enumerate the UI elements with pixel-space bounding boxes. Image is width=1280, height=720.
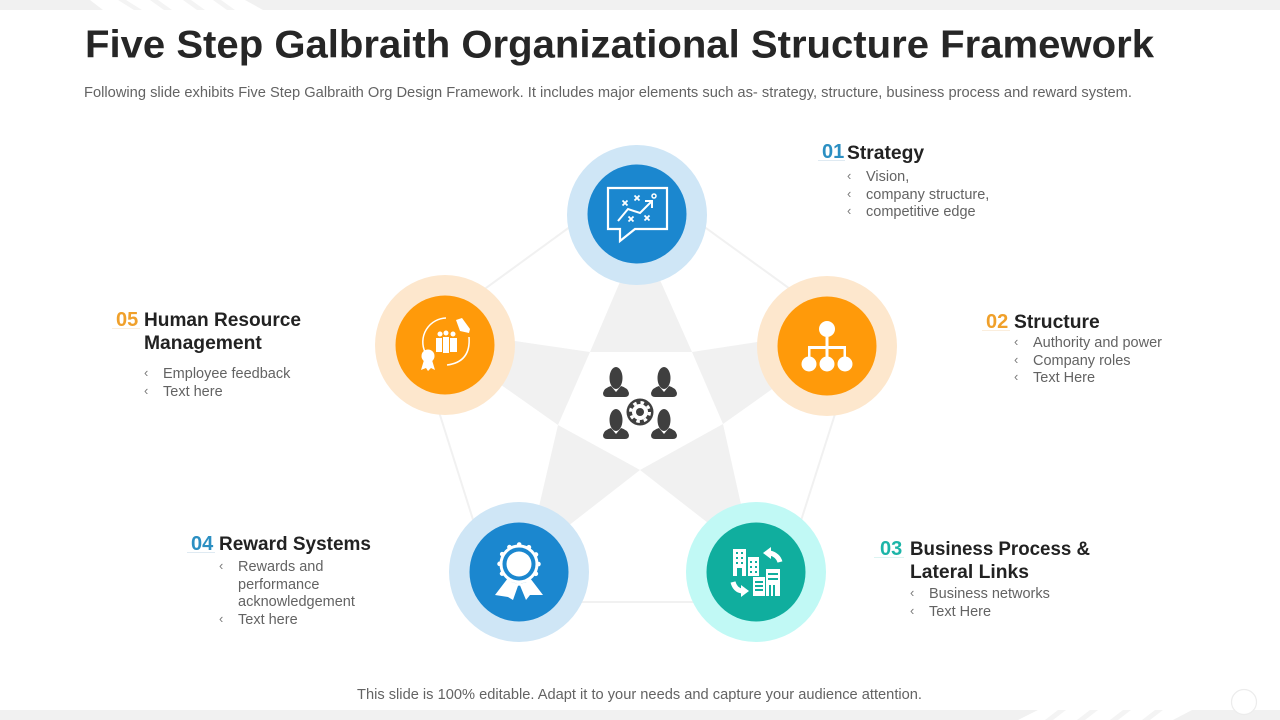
icon: org chart	[802, 321, 852, 372]
text block 05: human resource management	[112, 309, 301, 400]
text block 03: business process: Lateral Links	[910, 562, 1029, 583]
text block 02: structure: ‹	[1014, 369, 1018, 384]
node 3: business process circle	[686, 502, 826, 642]
text block 01: strategy: 01	[822, 141, 844, 163]
text block 04: reward systems: acknowledgement	[238, 594, 355, 610]
text block 02: structure: ‹	[1014, 334, 1018, 349]
text block 04: reward systems: performance	[238, 577, 319, 593]
text block 04: reward systems: Reward Systems	[219, 534, 371, 555]
text block 01: strategy: Vision,	[866, 169, 909, 185]
icon: buildings and arrows	[733, 547, 780, 597]
text block 03: business process: Business Process &	[910, 539, 1090, 560]
text block 03: business process: 03	[880, 538, 902, 560]
text block 02: structure	[982, 311, 1162, 386]
text block 01: strategy: competitive edge	[866, 204, 976, 220]
text block 03: business process: ‹	[910, 603, 914, 618]
text block 04: reward systems: ‹	[219, 611, 223, 626]
node 5: human resource circle	[375, 275, 515, 415]
pentagon outline	[416, 178, 859, 602]
text block 04: reward systems: Rewards and	[238, 559, 323, 575]
text block 05: human resource management: ‹	[144, 365, 148, 380]
icon: team with rosette and bell	[421, 318, 470, 371]
text block 01: strategy: ‹	[847, 168, 851, 183]
text block 02: structure: ‹	[1014, 352, 1018, 367]
text block 05: human resource management: Human Resource	[144, 310, 301, 331]
icon: rosette	[495, 544, 543, 600]
text block 02: structure: Authority and power	[1033, 335, 1162, 351]
text block 04: reward systems: ‹	[219, 558, 223, 573]
text block 05: human resource management: Text here	[163, 384, 223, 400]
text block 05: human resource management: ‹	[144, 383, 148, 398]
central star	[419, 235, 861, 558]
footer note: This slide is 100% editable. Adapt it to your needs and capture your audience attention.	[357, 687, 922, 703]
node 1: strategy circle	[567, 145, 707, 285]
text block 05: human resource management: Employee feedback	[163, 366, 291, 382]
text block 05: human resource management: Management	[144, 333, 262, 354]
subtitle: Following slide exhibits Five Step Galbraith Org Design Framework. It includes major elements such as- strategy, structure, business process and reward system.	[84, 85, 1132, 101]
text block 02: structure: Structure	[1014, 312, 1100, 333]
text block 03: business process: Text Here	[929, 604, 991, 620]
text block 01: strategy	[818, 141, 989, 220]
text block 03: business process: ‹	[910, 585, 914, 600]
node 4: reward systems circle	[449, 502, 589, 642]
text block 02: structure: Company roles	[1033, 353, 1131, 369]
text block 04: reward systems	[187, 533, 371, 628]
text block 03: business process	[874, 538, 1090, 620]
title: Five Step Galbraith Organizational Structure Framework	[85, 24, 1154, 66]
icon: team around a gear	[603, 367, 677, 439]
text block 02: structure: 02	[986, 311, 1008, 333]
text block 03: business process: Business networks	[929, 586, 1050, 602]
node 2: structure circle	[757, 276, 897, 416]
icon: chart in speech bubble	[608, 188, 667, 241]
text block 02: structure: Text Here	[1033, 370, 1095, 386]
text block 04: reward systems: Text here	[238, 612, 298, 628]
text block 05: human resource management: 05	[116, 309, 138, 331]
text block 01: strategy: ‹	[847, 186, 851, 201]
text block 01: strategy: company structure,	[866, 187, 989, 203]
text block 01: strategy: Strategy	[847, 143, 924, 164]
text block 04: reward systems: 04	[191, 533, 214, 555]
text block 01: strategy: ‹	[847, 203, 851, 218]
